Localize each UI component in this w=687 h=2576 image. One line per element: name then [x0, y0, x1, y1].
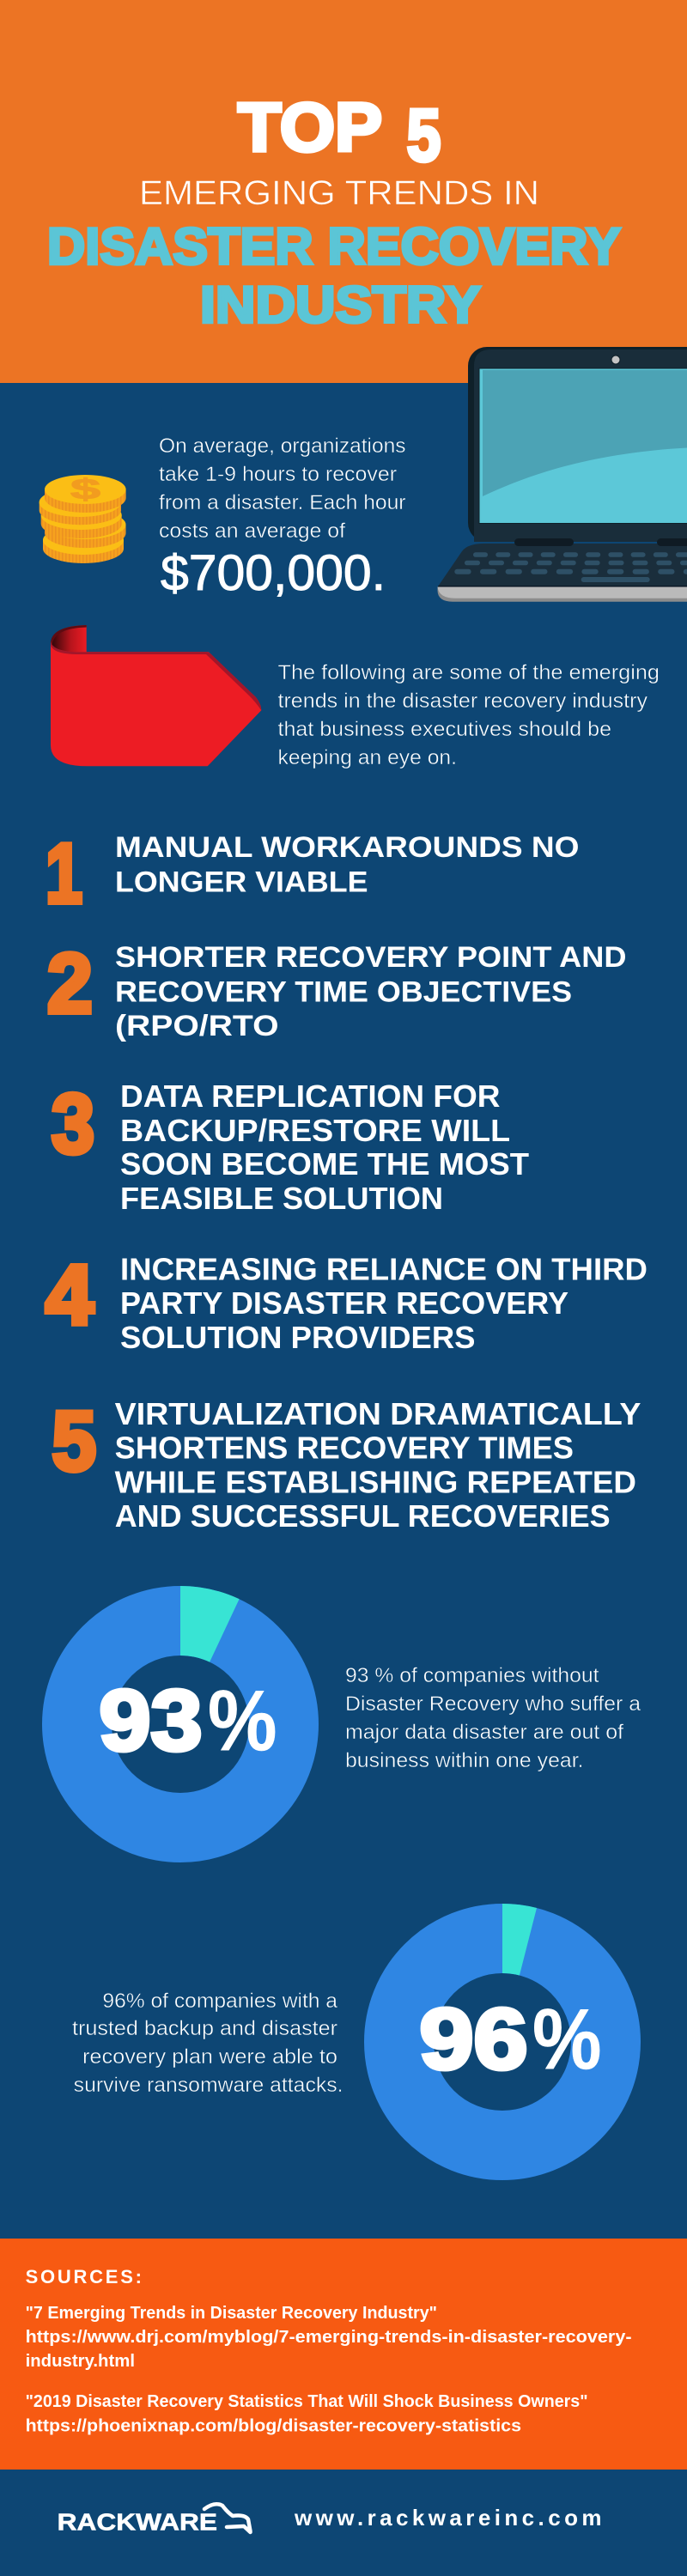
title: top 5	[238, 89, 441, 177]
trend 3 heading: FEASIBLE SOLUTION	[120, 1181, 443, 1216]
source 1: industry.html	[26, 2352, 135, 2371]
trend 3 heading: SOON BECOME THE MOST	[120, 1146, 529, 1182]
text: introduction to trends: that business executives should be	[278, 718, 611, 741]
text: 93% statistic	[345, 1664, 641, 1772]
text: average recovery cost: take 1-9 hours to recover	[159, 463, 397, 486]
title: disaster recovery industry: INDUSTRY	[200, 276, 481, 333]
trend 2 heading: SHORTER RECOVERY POINT AND	[115, 941, 627, 974]
logo: rackware: RACKWARE	[58, 2509, 217, 2536]
trend 4	[46, 1248, 647, 1355]
panel: sources	[0, 2239, 687, 2470]
number 4: 4	[46, 1248, 94, 1342]
icon: laptop	[438, 347, 687, 602]
title: disaster recovery industry	[47, 218, 621, 333]
coin 3	[41, 501, 122, 538]
text: introduction to trends	[278, 661, 660, 769]
source 2	[26, 2392, 588, 2436]
text: average recovery cost: costs an average of	[159, 519, 345, 543]
donut chart: 93%	[77, 1586, 283, 1827]
text: 96% statistic: 96% of companies with a	[102, 1990, 338, 2013]
sources heading: SOURCES:	[26, 2266, 142, 2287]
trend 5 heading: AND SUCCESSFUL RECOVERIES	[115, 1498, 611, 1534]
website url: www.rackwareinc.com	[294, 2505, 601, 2530]
number 3: 3	[52, 1077, 94, 1171]
trend 5 heading	[115, 1396, 641, 1534]
trend 3 heading	[120, 1078, 529, 1216]
trend 5	[52, 1394, 641, 1534]
cost figure: $700,000.	[161, 545, 386, 601]
trend 5 heading: WHILE ESTABLISHING REPEATED	[115, 1465, 636, 1500]
value 96%: %	[532, 1991, 601, 2087]
text: 96% statistic	[72, 1990, 344, 2097]
trend 4 heading: SOLUTION PROVIDERS	[120, 1320, 476, 1355]
source 2: https://phoenixnap.com/blog/disaster-recovery-statistics	[26, 2417, 521, 2436]
text: average recovery cost	[159, 434, 406, 601]
coin 2	[40, 488, 121, 525]
trend 1	[46, 826, 579, 920]
trend 1 heading	[115, 831, 579, 898]
text: introduction to trends: keeping an eye on.	[278, 746, 457, 769]
text: 96% statistic: trusted backup and disaster	[72, 2017, 337, 2040]
coin 4	[45, 510, 126, 548]
text: average recovery cost: from a disaster. Each hour	[159, 491, 406, 514]
number 2: 2	[47, 936, 93, 1030]
text: 96% statistic: recovery plan were able to	[82, 2045, 337, 2069]
text: introduction to trends: trends in the disaster recovery industry	[278, 690, 647, 713]
title: top 5: TOP	[238, 89, 382, 165]
trend 1 heading: LONGER VIABLE	[115, 866, 368, 898]
source 2: "2019 Disaster Recovery Statistics That Will Shock Business Owners"	[26, 2392, 588, 2411]
text: 96% statistic: survive ransomware attacks.	[74, 2074, 343, 2097]
trend 2	[47, 936, 627, 1042]
coin 5	[43, 526, 124, 563]
subtitle: EMERGING TRENDS IN	[139, 174, 539, 212]
value 93%: 93	[100, 1673, 203, 1769]
trend 4 heading	[120, 1252, 647, 1355]
icon: cloud mark	[204, 2504, 251, 2532]
text: 93% statistic: major data disaster are out of	[345, 1721, 623, 1744]
text: 93% statistic: Disaster Recovery who suffer a	[345, 1692, 641, 1716]
text: 93% statistic: 93 % of companies without	[345, 1664, 599, 1687]
value 93%: %	[208, 1673, 277, 1769]
trend 2 heading	[115, 941, 627, 1042]
donut chart: 96%	[398, 1904, 606, 2145]
logo: rackware	[58, 2504, 251, 2536]
number 5: 5	[52, 1394, 96, 1488]
coin 1: $	[70, 473, 100, 505]
trend 3 heading: DATA REPLICATION FOR	[120, 1078, 500, 1114]
trend 3 heading: BACKUP/RESTORE WILL	[120, 1113, 510, 1148]
icon: red ribbon	[51, 625, 261, 766]
text: average recovery cost: On average, organizations	[159, 434, 406, 458]
trend 2 heading: (RPO/RTO	[115, 1010, 278, 1042]
source 1: https://www.drj.com/myblog/7-emerging-trends-in-disaster-recovery-	[26, 2328, 632, 2347]
trend 2 heading: RECOVERY TIME OBJECTIVES	[115, 975, 572, 1008]
source 1	[26, 2304, 632, 2371]
icon: coins	[40, 473, 126, 563]
header panel	[0, 0, 687, 383]
value 96%: 96	[419, 1991, 527, 2087]
text: 93% statistic: business within one year.	[345, 1749, 584, 1772]
trend 3	[52, 1077, 529, 1216]
text: introduction to trends: The following are some of the emerging	[278, 661, 660, 684]
number 1: 1	[46, 826, 82, 920]
source 1: "7 Emerging Trends in Disaster Recovery Industry"	[26, 2304, 437, 2323]
title: disaster recovery industry: DISASTER RECOVERY	[47, 218, 621, 275]
trend 1 heading: MANUAL WORKAROUNDS NO	[115, 831, 579, 864]
title: top 5: 5	[407, 94, 441, 177]
trend 5 heading: SHORTENS RECOVERY TIMES	[115, 1431, 574, 1466]
trend 4 heading: INCREASING RELIANCE ON THIRD	[120, 1252, 647, 1286]
trend 5 heading: VIRTUALIZATION DRAMATICALLY	[115, 1396, 641, 1431]
trend 4 heading: PARTY DISASTER RECOVERY	[120, 1285, 568, 1321]
